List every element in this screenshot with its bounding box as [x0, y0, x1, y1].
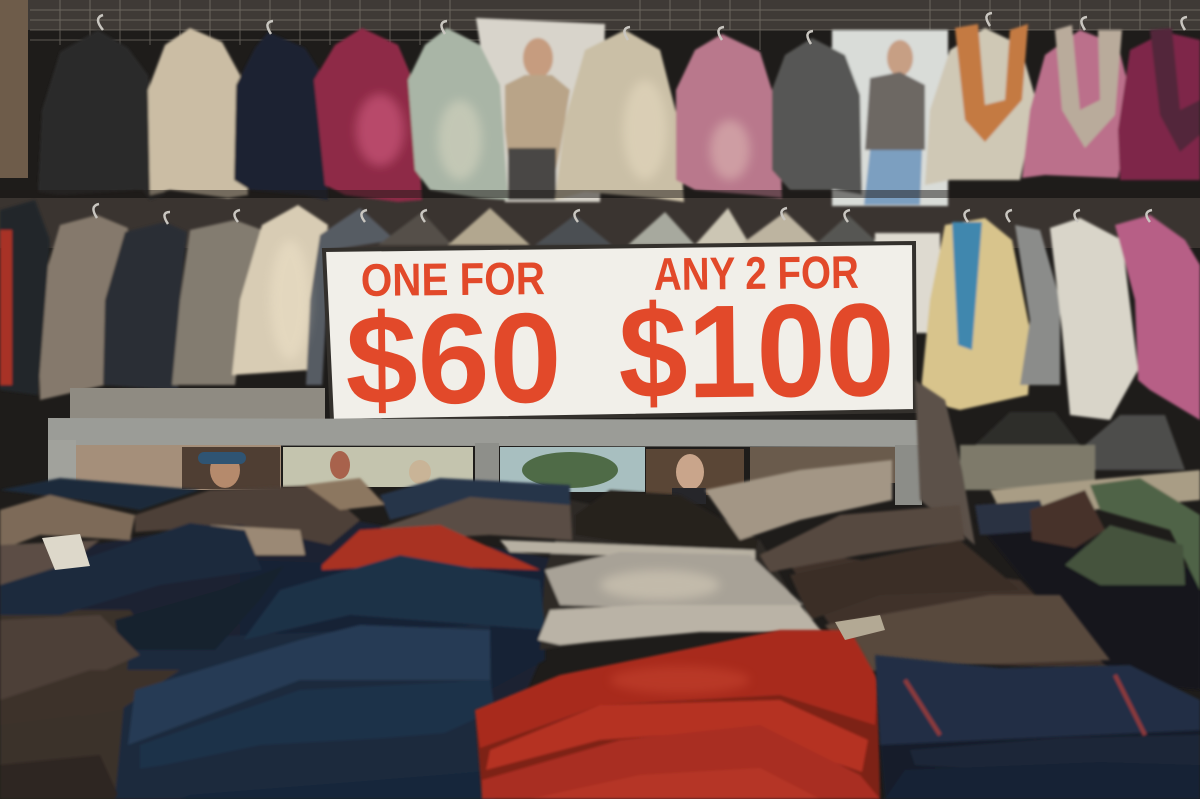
sweater pink: [676, 34, 782, 198]
right rail: small garments: [915, 380, 1185, 545]
white garment right of sign: [875, 233, 940, 333]
wire mesh rack: [30, 0, 1200, 50]
sweater beige with scarf: [925, 28, 1036, 185]
sign text: any 2 for: ANY 2 FOR: [654, 246, 859, 300]
sign price: 60 dollars: $60: [345, 287, 562, 432]
shelf and dark wall band: [0, 190, 1200, 198]
sweater charcoal: [772, 38, 862, 195]
sweater sage: [408, 28, 508, 200]
front navy plaid stack: [875, 655, 1200, 799]
sweater cream: [148, 28, 248, 198]
front red stack: [475, 630, 880, 799]
poster: woman in grey: [832, 30, 948, 206]
sign text: one for: ONE FOR: [361, 252, 545, 306]
sweater rose with scarf: [1022, 30, 1132, 178]
sign price: 100 dollars: $100: [618, 276, 895, 426]
sweater black: [38, 30, 165, 200]
cabinet photos: [76, 445, 895, 504]
sweater plum with scarf: [1118, 32, 1200, 180]
sign: [324, 243, 915, 432]
sweater ivory: [232, 205, 328, 375]
sign board: [324, 243, 915, 421]
hangers: [93, 13, 1187, 224]
display cabinet: [48, 388, 922, 505]
table and right pile: [975, 470, 1200, 690]
collars row: [378, 212, 452, 245]
pink coat: [1115, 215, 1200, 420]
sweater taupe: [38, 215, 128, 400]
bottom row sweaters: [0, 200, 1200, 420]
sweater stone: [172, 220, 262, 385]
grey cardigan: [1015, 225, 1060, 385]
yellow cardigan: [920, 218, 1032, 410]
top row sweaters: [38, 18, 1200, 206]
pile base shading: [0, 500, 1110, 799]
sunlight patches: [270, 80, 750, 694]
sweater grey behind sign: [306, 208, 395, 385]
poster: woman in beige: [476, 18, 605, 202]
left dark clothes: [0, 200, 50, 395]
sweater crimson: [314, 28, 422, 202]
white cardigan: [1050, 218, 1138, 420]
sweater navy: [234, 32, 328, 200]
sweater oatmeal: [555, 30, 684, 202]
price tag cards: [42, 534, 885, 640]
stacks of sweaters middle tier: [0, 460, 1110, 799]
sweater slate: [103, 222, 187, 390]
